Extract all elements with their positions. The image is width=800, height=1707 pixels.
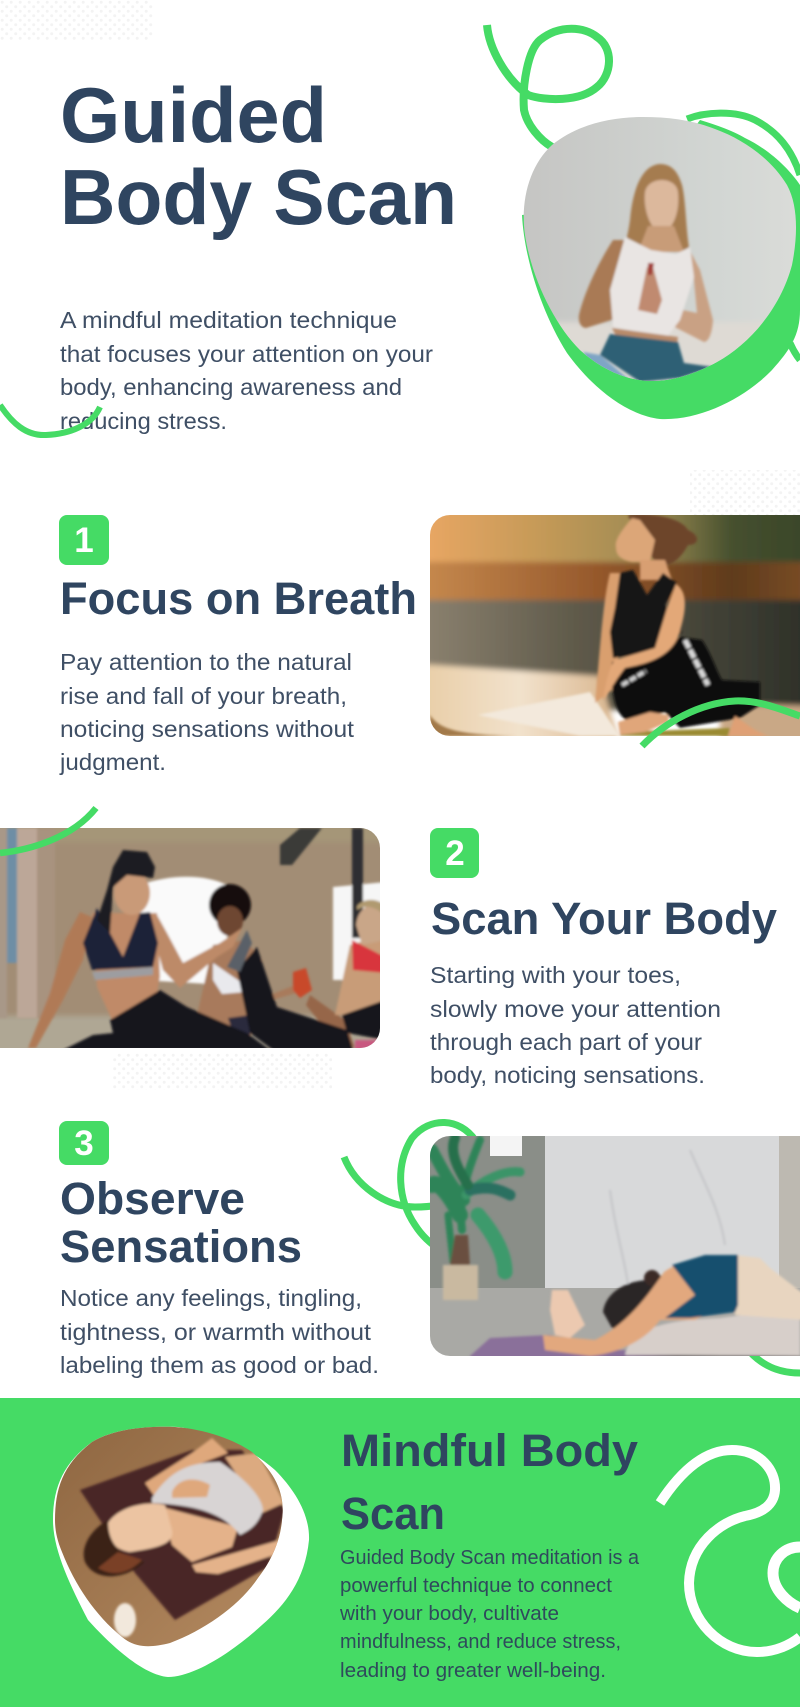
green curve below photo 3 — [750, 1352, 800, 1373]
step 3 text — [60, 1285, 379, 1378]
white blob behind photo — [53, 1427, 309, 1677]
heading: observe sensations: Observe — [60, 1173, 245, 1224]
intro text: A mindful meditation technique — [60, 307, 397, 333]
green swirl behind photo 3 — [344, 1122, 475, 1250]
step 3 text: labeling them as good or bad. — [60, 1352, 379, 1378]
step 1 panel — [59, 470, 800, 775]
photo: woman meditating in prayer pose — [524, 117, 796, 381]
photo: woman twisting by the water at sunset — [430, 515, 800, 736]
intro text: that focuses your attention on your — [60, 341, 433, 367]
heading: observe sensations — [60, 1173, 302, 1272]
green curve over photo 2 — [0, 808, 96, 853]
hero panel — [0, 0, 800, 435]
green footer panel — [0, 1398, 800, 1707]
heading: observe sensations: Sensations — [60, 1221, 302, 1272]
badge 3: 3 — [74, 1124, 94, 1163]
step 2 panel — [0, 808, 777, 1090]
title: Body Scan — [60, 153, 457, 241]
step 2 text: slowly move your attention — [430, 996, 721, 1022]
step 3 text: tightness, or warmth without — [60, 1319, 372, 1345]
badge 2 — [430, 828, 479, 878]
step 3 text: Notice any feelings, tingling, — [60, 1285, 362, 1311]
step 1 text: noticing sensations without — [60, 716, 355, 742]
intro text: body, enhancing awareness and — [60, 374, 402, 400]
photo: group stretching in a studio — [0, 820, 390, 1056]
step 3 panel — [59, 1121, 800, 1378]
heading: focus on breath: Focus on Breath — [60, 573, 417, 624]
heading: mindful body scan: Scan — [341, 1488, 445, 1539]
heading: mindful body scan — [341, 1425, 638, 1539]
footer background — [0, 1398, 800, 1707]
badge 1 — [59, 515, 109, 565]
dotted pattern: below photo — [112, 1053, 332, 1090]
heading: scan your body: Scan Your Body — [431, 893, 777, 944]
title — [60, 71, 457, 241]
white swirl — [660, 1450, 800, 1652]
step 2 text — [430, 962, 721, 1088]
footer text: Guided Body Scan meditation is a — [340, 1546, 640, 1569]
step 1 text: rise and fall of your breath, — [60, 683, 347, 709]
heading: mindful body scan: Mindful Body — [341, 1425, 638, 1476]
dotted pattern: right — [690, 470, 800, 515]
step 1 text: judgment. — [59, 749, 166, 775]
step 1 text — [59, 649, 355, 775]
photo: woman in seated forward fold — [430, 1136, 800, 1360]
step 2 text: through each part of your — [430, 1029, 702, 1055]
intro text: reducing stress. — [60, 408, 227, 434]
green swirl behind portrait — [487, 25, 609, 147]
badge 3 — [59, 1121, 109, 1165]
green curve over intro text — [0, 405, 100, 435]
footer text: leading to greater well-being. — [340, 1659, 606, 1682]
intro text — [60, 307, 433, 434]
footer text: with your body, cultivate — [339, 1602, 559, 1625]
title: Guided — [60, 71, 327, 159]
badge 1: 1 — [74, 521, 94, 560]
step 1 text: Pay attention to the natural — [60, 649, 352, 675]
badge 2: 2 — [445, 834, 465, 873]
photo: woman lying on a mat with candle — [55, 1426, 283, 1646]
footer text — [339, 1546, 640, 1682]
green curve over photo 1 — [642, 701, 800, 746]
dotted pattern: top left — [0, 0, 153, 40]
green blob behind portrait — [522, 113, 800, 419]
step 2 text: Starting with your toes, — [430, 962, 681, 988]
footer text: powerful technique to connect — [340, 1574, 612, 1597]
step 2 text: body, noticing sensations. — [430, 1062, 705, 1088]
footer text: mindfulness, and reduce stress, — [340, 1630, 621, 1653]
